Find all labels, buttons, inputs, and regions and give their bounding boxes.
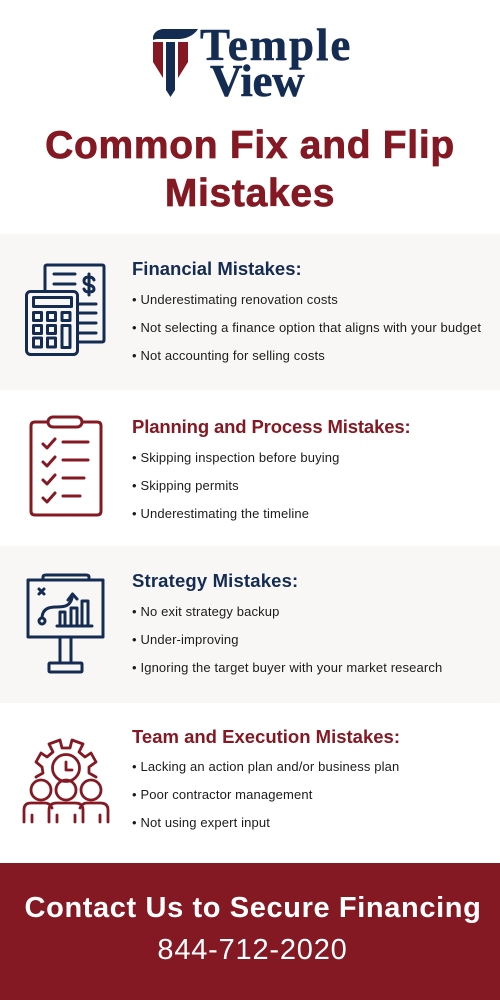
wordmark line one: Temple [200,20,352,70]
list item: • Poor contractor management [132,787,312,802]
list item: • Lacking an action plan and/or business plan [132,759,399,774]
footer call to action [0,863,500,1000]
heading: team and execution mistakes: Team and Execution Mistakes: [132,726,400,747]
panel: financial mistakes [0,234,500,390]
panel: planning and process mistakes [0,390,500,546]
call to action heading: Contact Us to Secure Financing [25,892,481,924]
list item: • Skipping inspection before buying [132,450,339,465]
panel: strategy mistakes [0,546,500,703]
list item: • Underestimating renovation costs [132,292,338,307]
list item: • Ignoring the target buyer with your market research [132,660,442,675]
list item: • Under-improving [132,632,239,647]
list item: • No exit strategy backup [132,604,280,619]
logo [153,20,352,106]
list item: • Not selecting a finance option that aligns with your budget [132,320,481,335]
list item: • Not accounting for selling costs [132,348,325,363]
title [45,124,455,215]
icon: calculator and invoice [25,264,106,356]
logo wordmark [200,20,352,106]
heading: financial mistakes: Financial Mistakes: [132,258,302,279]
title: Common Fix and Flip [45,124,455,167]
heading: planning and process mistakes: Planning and Process Mistakes: [132,416,411,437]
list item: • Skipping permits [132,478,239,493]
list item: • Underestimating the timeline [132,506,309,521]
icon: clipboard checklist [30,416,102,516]
logo mark [153,29,198,97]
wordmark line two: View [210,56,304,106]
icon: team with gear and clock [22,738,110,824]
panel: team and execution mistakes [0,703,500,863]
phone number: 844-712-2020 [157,934,348,966]
icon: presentation board [26,574,104,674]
title: Mistakes [165,172,335,215]
list item: • Not using expert input [132,815,270,830]
heading: strategy mistakes: Strategy Mistakes: [132,570,298,591]
